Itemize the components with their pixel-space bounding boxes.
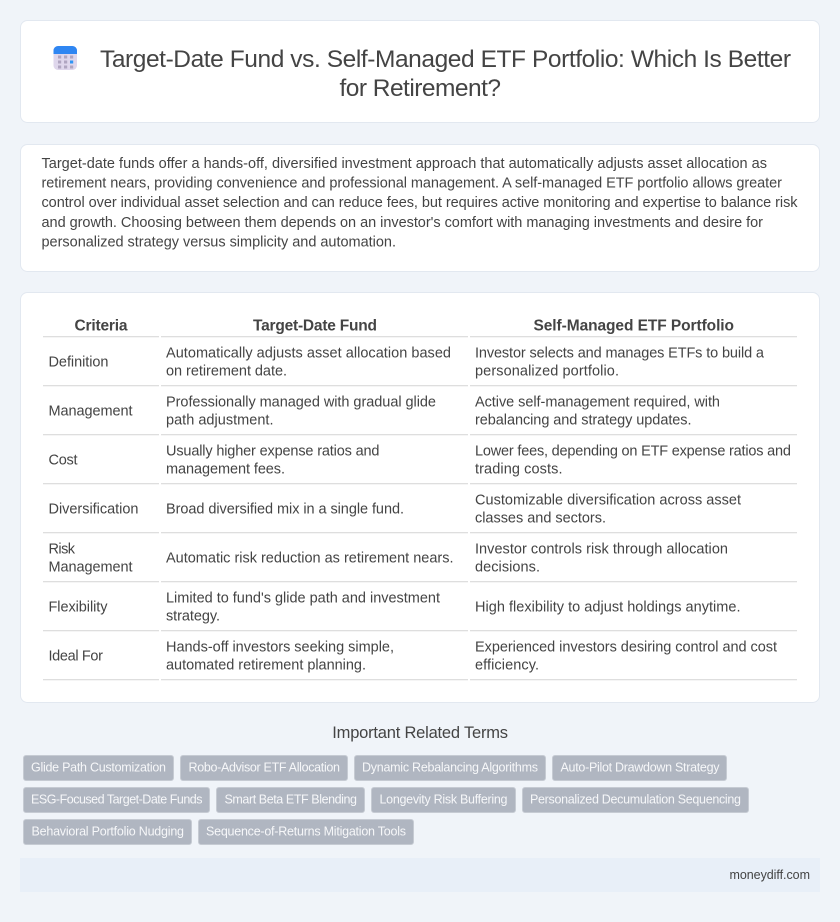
row: risk management	[48, 542, 728, 576]
tag: longevity risk: Longevity Risk Buffering	[380, 793, 508, 807]
tag: auto-pilot	[552, 756, 726, 780]
row: ideal for: Experienced investors desiring control and cost	[475, 640, 777, 656]
row: definition: Automatically adjusts asset allocation based	[166, 346, 451, 362]
related term tags	[24, 756, 748, 844]
row: cost	[48, 444, 791, 478]
panel: introduction	[20, 144, 820, 272]
text block: summary paragraph: retirement nears, providing convenience and professional management. A self-managed ETF portfolio allows greater	[42, 176, 782, 192]
row: flexibility	[48, 590, 740, 624]
row: definition: Investor selects and manages ETFs to build a	[475, 346, 765, 362]
text block: summary paragraph	[42, 156, 798, 250]
row: management: Active self-management required, with	[475, 394, 720, 410]
tag: sequence-of-returns	[198, 820, 414, 844]
table header: Target-Date Fund	[253, 318, 377, 335]
text block: summary paragraph: personalized strategy versus simplicity and automation.	[42, 234, 396, 250]
tag: smart beta	[216, 788, 364, 812]
text block: summary paragraph: control over individual asset selection and can reduce fees, but requires active monitoring and expertise to balance risk	[42, 195, 798, 211]
tag: auto-pilot: Auto-Pilot Drawdown Strategy	[560, 761, 720, 775]
row: definition: personalized portfolio.	[475, 364, 619, 380]
table header	[74, 318, 734, 335]
tag: esg-focused: ESG-Focused Target-Date Funds	[31, 793, 202, 807]
tag: longevity risk	[372, 788, 516, 812]
row: flexibility: strategy.	[166, 608, 220, 624]
title: for Retirement?	[340, 75, 501, 102]
tag: personalized decumulation	[522, 788, 748, 812]
icon: calendar	[54, 46, 77, 70]
tag: robo-advisor	[180, 756, 348, 780]
row: risk management: decisions.	[475, 560, 540, 576]
row: risk management: Automatic risk reduction as retirement nears.	[166, 550, 454, 566]
row: cost: management fees.	[166, 462, 285, 478]
table header: Self-Managed ETF Portfolio	[534, 318, 734, 335]
row: definition: on retirement date.	[166, 364, 287, 380]
tag: sequence-of-returns: Sequence-of-Returns Mitigation Tools	[206, 825, 406, 839]
row: cost: Usually higher expense ratios and	[166, 444, 380, 460]
heading: important related terms: Important Related Terms	[332, 724, 508, 742]
row: flexibility: Limited to fund's glide path and investment	[166, 590, 440, 606]
tag: robo-advisor: Robo-Advisor ETF Allocation	[188, 761, 340, 775]
row: diversification: classes and sectors.	[475, 510, 606, 526]
footer	[20, 858, 820, 892]
row: flexibility: Flexibility	[48, 600, 108, 616]
row: diversification: Customizable diversification across asset	[475, 492, 741, 508]
row: diversification: Diversification	[48, 502, 138, 518]
row: ideal for: efficiency.	[475, 658, 539, 674]
row: cost: Cost	[48, 452, 78, 468]
footer: moneydiff.com	[730, 868, 810, 882]
tag: smart beta: Smart Beta ETF Blending	[224, 793, 357, 807]
tag: behavioral nudging	[24, 820, 192, 844]
tag: esg-focused	[24, 788, 210, 812]
row: diversification: Broad diversified mix in a single fund.	[166, 502, 404, 518]
row: definition: Definition	[48, 354, 108, 370]
tag: behavioral nudging: Behavioral Portfolio Nudging	[32, 825, 184, 839]
row: management: rebalancing and strategy updates.	[475, 412, 692, 428]
tag: dynamic rebalancing	[354, 756, 546, 780]
row: management: path adjustment.	[166, 412, 274, 428]
row: risk management: Risk	[48, 542, 76, 558]
row: risk management: Investor controls risk through allocation	[475, 542, 728, 558]
row: risk management: Management	[48, 560, 132, 576]
panel: header	[20, 20, 820, 122]
row: definition	[48, 346, 765, 380]
tag: dynamic rebalancing: Dynamic Rebalancing Algorithms	[362, 761, 538, 775]
row: ideal for: automated retirement planning.	[166, 658, 366, 674]
row: ideal for: Hands-off investors seeking simple,	[166, 640, 394, 656]
row: flexibility: High flexibility to adjust holdings anytime.	[475, 600, 740, 616]
row: management	[48, 394, 720, 428]
table header: Criteria	[74, 318, 128, 335]
row: ideal for: Ideal For	[48, 648, 103, 664]
row: cost: trading costs.	[475, 462, 562, 478]
title	[100, 46, 791, 102]
row: cost: Lower fees, depending on ETF expense ratios and	[475, 444, 791, 460]
text block: summary paragraph: Target-date funds offer a hands-off, diversified investment approach that automatically adjusts asset allocation as	[42, 156, 767, 172]
title: Target-Date Fund vs. Self-Managed ETF Portfolio: Which Is Better	[100, 46, 791, 73]
row: management: Management	[48, 404, 132, 420]
row: management: Professionally managed with gradual glide	[166, 394, 436, 410]
row: diversification	[48, 492, 741, 526]
panel: comparison table	[20, 292, 820, 702]
tag: glide path customization	[24, 756, 174, 780]
tag: personalized decumulation: Personalized Decumulation Sequencing	[530, 793, 741, 807]
tag: glide path customization: Glide Path Customization	[31, 761, 166, 775]
row: ideal for	[48, 640, 777, 674]
text block: summary paragraph: and growth. Choosing between them depends on an investor's comfort with managing investments and desire for	[42, 215, 763, 231]
